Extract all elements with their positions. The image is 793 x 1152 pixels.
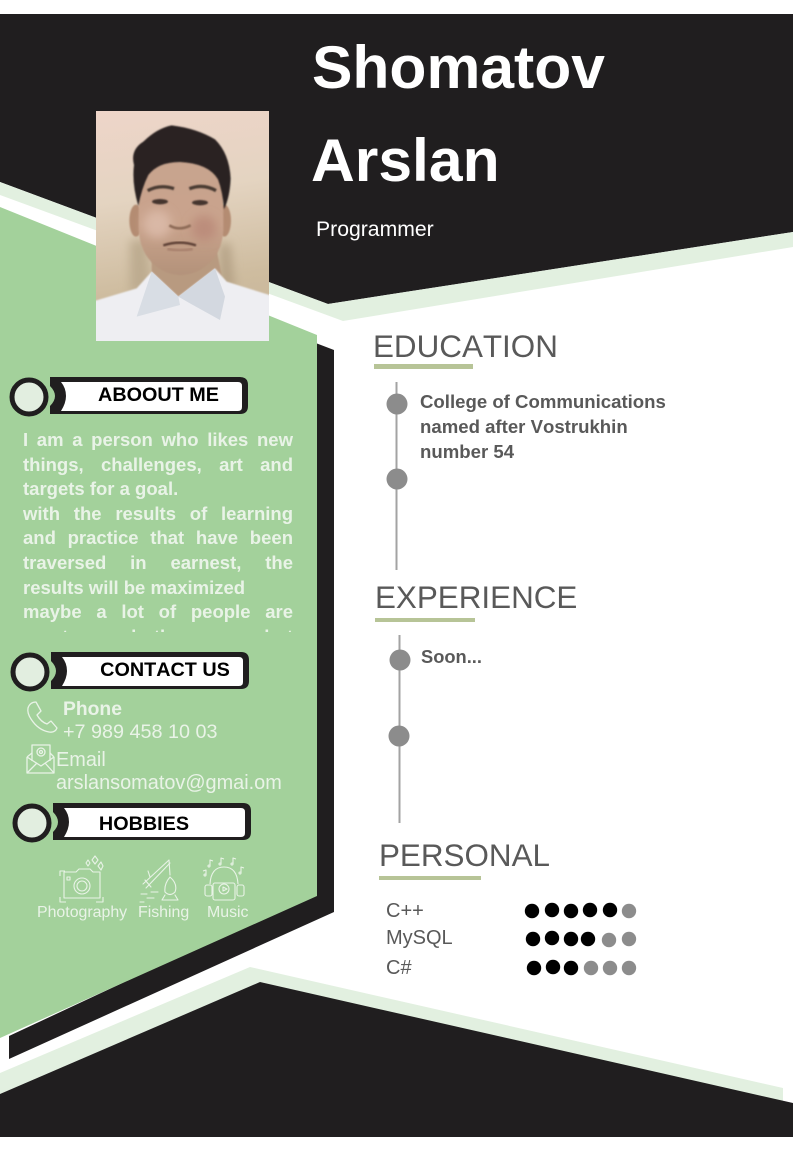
about me paragraph: I am a person who likes new xyxy=(23,429,293,450)
about me paragraph xyxy=(23,429,293,632)
about me paragraph: targets for a goal. xyxy=(23,478,178,499)
heading: personal: PERSONAL xyxy=(379,838,550,873)
eyebrows xyxy=(148,187,174,191)
bottom light green stripe xyxy=(0,967,783,1103)
about me paragraph: results will be maximized xyxy=(23,577,245,598)
job title: Programmer xyxy=(316,218,434,241)
section banner: about me: ABOOUT ME xyxy=(98,384,219,406)
email address: arslansomatov@gmai.om xyxy=(56,772,282,794)
eyes xyxy=(152,199,168,204)
education entry xyxy=(420,391,666,462)
hobby label: photography: Photography xyxy=(37,904,127,921)
sidebar shadow xyxy=(9,337,334,1059)
skill label: C#: C# xyxy=(386,957,412,979)
about me paragraph: traversed in earnest, the xyxy=(23,552,293,573)
education entry: number 54 xyxy=(420,441,514,462)
nose xyxy=(169,225,191,228)
bottom dark band xyxy=(0,982,793,1137)
section banner: contact us: CONTACT US xyxy=(100,659,230,681)
education underline xyxy=(374,364,473,369)
about me paragraph: and practice that have been xyxy=(23,527,293,548)
experience entry: Soon... xyxy=(421,646,482,667)
face xyxy=(138,162,224,262)
education entry: named after Vostrukhin xyxy=(420,416,628,437)
hair xyxy=(133,125,231,209)
top dark band xyxy=(0,14,793,304)
heading: experience: EXPERIENCE xyxy=(375,580,577,615)
neck xyxy=(151,253,222,296)
heading: education: EDUCATION xyxy=(373,329,558,364)
phone label: Phone xyxy=(63,699,122,720)
name: first line: Shomatov xyxy=(312,33,605,101)
mouth xyxy=(163,243,196,245)
phone number: +7 989 458 10 03 xyxy=(63,721,218,743)
personal underline xyxy=(379,876,481,880)
about me paragraph: things, challenges, art and xyxy=(23,454,293,475)
top light green stripe xyxy=(0,182,793,321)
name: second line: Arslan xyxy=(311,126,500,194)
green sidebar xyxy=(0,207,317,1038)
section banner: hobbies: HOBBIES xyxy=(99,813,189,835)
hobby label: fishing: Fishing xyxy=(138,904,189,921)
shirt xyxy=(96,268,269,341)
skill label: C++: C++ xyxy=(386,900,424,922)
education entry: College of Communications xyxy=(420,391,666,412)
ears xyxy=(128,204,140,238)
skill label: MySQL: MySQL xyxy=(386,927,453,949)
hobby label: music: Music xyxy=(207,904,248,921)
wall shadow around neck xyxy=(130,240,152,293)
photo portrait xyxy=(96,111,269,341)
about me paragraph: with the results of learning xyxy=(23,503,293,524)
experience underline xyxy=(375,618,475,622)
email label: Email xyxy=(56,749,106,771)
about me paragraph: maybe a lot of people are xyxy=(23,601,293,622)
